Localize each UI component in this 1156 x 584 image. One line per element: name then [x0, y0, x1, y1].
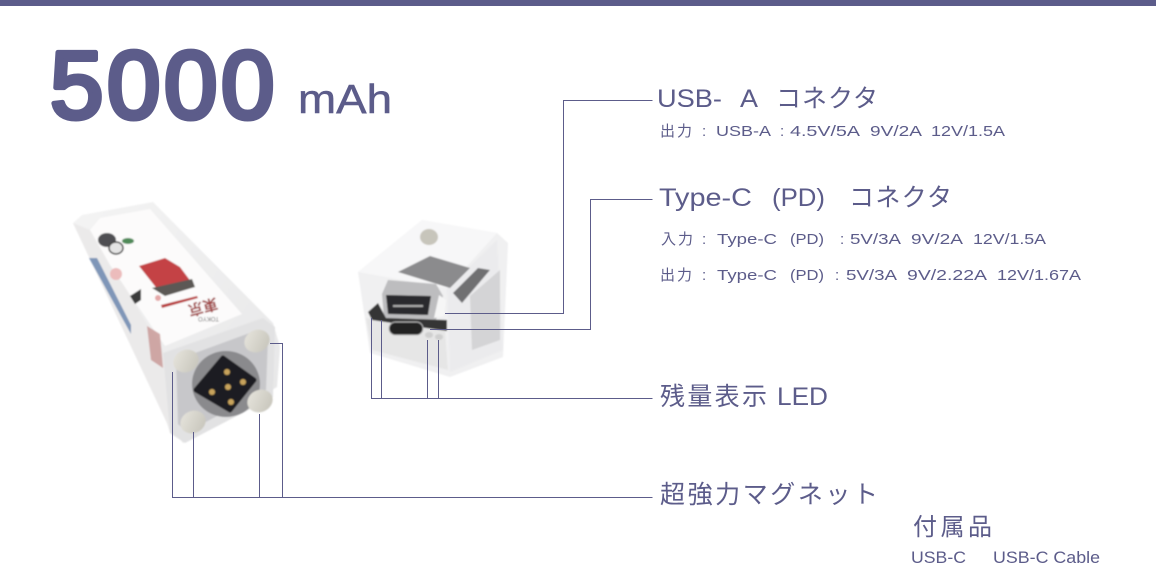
- spec: Type-C output: Type-C: [717, 267, 777, 284]
- label: panda: [98, 233, 134, 254]
- front face: [163, 318, 275, 443]
- title: capacity: [50, 32, 392, 139]
- spec: USB-A output: 12V/1.5A: [931, 123, 1005, 140]
- heading: Type-C connector: (PD): [772, 184, 825, 212]
- heading: USB-A connector: A: [740, 85, 758, 113]
- spec: Type-C input: 入力: [661, 231, 693, 248]
- label: Tokyo title: TOKYO: [198, 315, 219, 321]
- heading: Type-C connector: [659, 184, 952, 212]
- spec: Type-C output: :: [835, 267, 839, 284]
- LEDs: [425, 332, 443, 340]
- label: Tokyo title: 東京: [186, 294, 220, 319]
- spec: Type-C input: 12V/1.5A: [973, 231, 1046, 248]
- spec: Type-C output: 5V/3A: [846, 267, 897, 284]
- spec: Type-C input: [661, 231, 1046, 248]
- label: blossoms and lantern: [110, 268, 161, 304]
- white cylinder label: [90, 209, 242, 346]
- label: Tokyo title: [161, 294, 220, 321]
- spec: Type-C input: (PD): [790, 231, 824, 248]
- title: capacity: 0: [107, 32, 160, 139]
- spec: Type-C input: :: [702, 231, 706, 248]
- spec: Type-C output: 出力: [660, 267, 692, 284]
- title: capacity: 0: [164, 32, 217, 139]
- spec: Type-C input: Type-C: [717, 231, 777, 248]
- text: accessories list: USB-C: [911, 548, 966, 567]
- photo: battery module with magnets: [73, 202, 280, 443]
- text: accessories list: [911, 548, 1100, 567]
- spec: USB-A output: USB-A: [716, 123, 771, 140]
- spec: Type-C input: 5V/3A: [850, 231, 901, 248]
- spec: USB-A output: 9V/2A: [870, 123, 922, 140]
- heading: Type-C connector: Type-C: [659, 184, 752, 212]
- pogo pin connector: [196, 358, 254, 410]
- heading: USB-A connector: コネクタ: [776, 85, 878, 113]
- top bar: [0, 0, 1156, 6]
- spec: Type-C output: :: [702, 267, 706, 284]
- spec: Type-C input: :: [840, 231, 844, 248]
- heading: USB-A connector: [657, 85, 878, 113]
- heading: accessories: 付属品: [913, 514, 992, 541]
- side panel: [73, 223, 170, 433]
- cherry blossom print: [147, 326, 163, 368]
- heading: Type-C connector: コネクタ: [849, 184, 952, 212]
- spec: Type-C input: 9V/2A: [911, 231, 963, 248]
- magnets: [170, 326, 276, 437]
- spec: Type-C output: [660, 267, 1081, 284]
- transparent shell: [358, 220, 508, 377]
- title: capacity: mAh: [298, 76, 392, 122]
- body shell: [73, 202, 280, 443]
- label: strong magnets: 超強力マグネット: [660, 481, 878, 509]
- title: capacity: 0: [221, 32, 274, 139]
- heading: USB-A connector: USB-: [657, 85, 722, 113]
- spec: USB-A output: [660, 123, 1005, 140]
- spec: USB-A output: 4.5V/5A: [790, 123, 860, 140]
- label: battery level LED: [660, 383, 828, 411]
- spec: Type-C output: (PD): [790, 267, 824, 284]
- title: capacity: 5: [50, 32, 103, 139]
- label: red castle: [139, 258, 195, 296]
- label: battery level LED: 残量表示: [660, 383, 767, 411]
- side tower print: [89, 258, 131, 334]
- photo: USB charger module: [358, 220, 508, 377]
- board edge and USB-C port: [368, 303, 447, 335]
- text: accessories list: USB-C Cable: [993, 548, 1100, 567]
- spec: Type-C output: 9V/2.22A: [907, 267, 987, 284]
- leader lines: [172, 100, 652, 498]
- spec: Type-C output: 12V/1.67A: [997, 267, 1081, 284]
- spec: USB-A output: :: [780, 123, 784, 140]
- spec: USB-A output: 出力: [660, 123, 692, 140]
- spec: USB-A output: :: [702, 123, 706, 140]
- internal board: [398, 256, 470, 288]
- USB-A port: [382, 280, 446, 320]
- label: battery level LED: LED: [777, 383, 828, 411]
